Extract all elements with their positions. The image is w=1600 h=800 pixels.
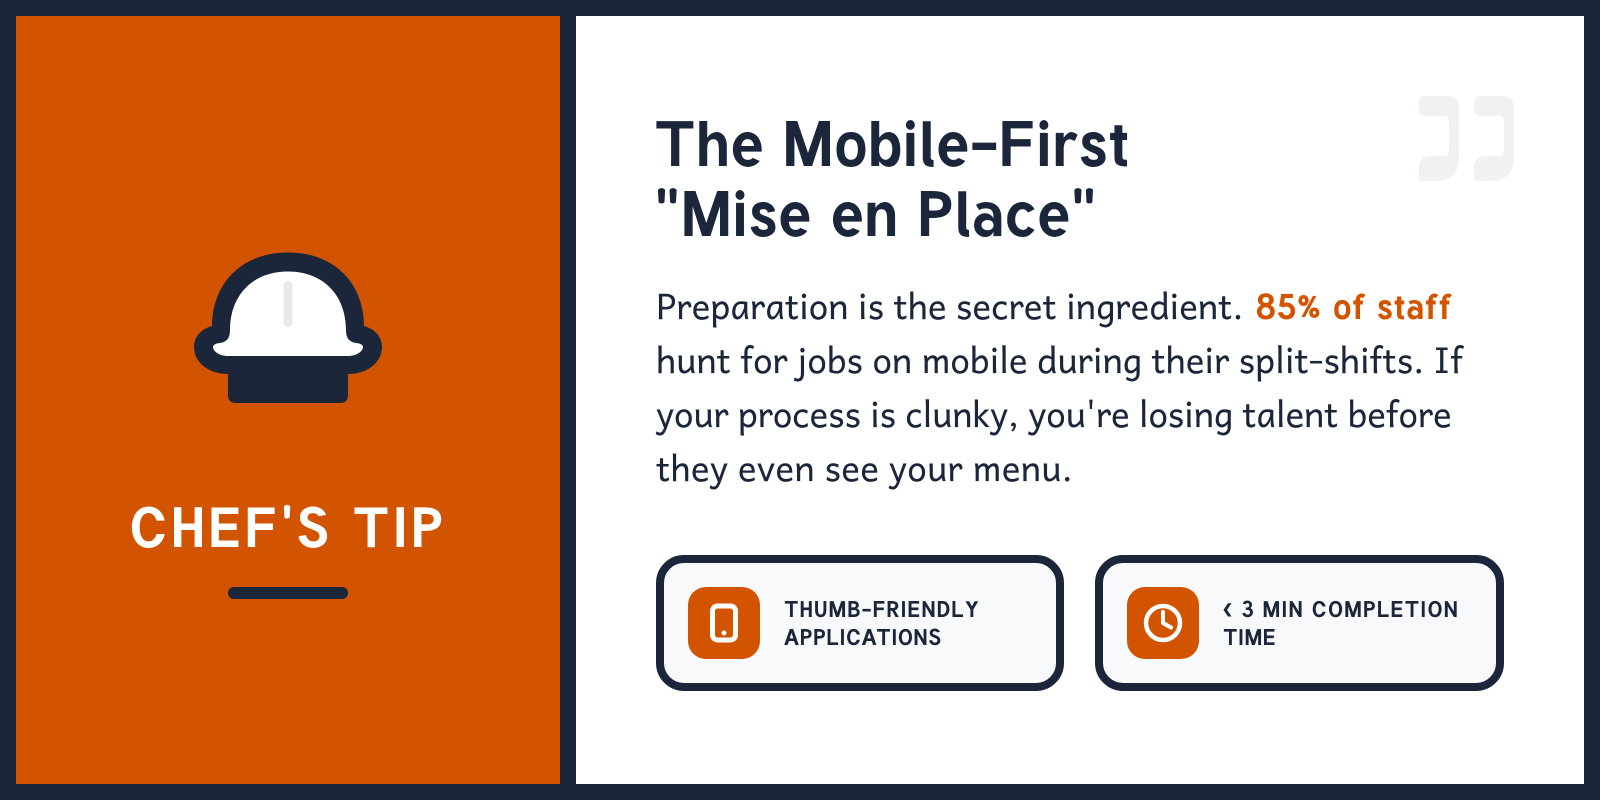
body text: hunt for jobs on mobile during their split-shifts. If (656, 330, 1463, 387)
heading: the mobile-first mise en place (654, 95, 1130, 258)
icon: phone (688, 587, 760, 659)
body text: Preparation is the secret ingredient. 85% of staff (656, 276, 1452, 333)
label: thumb-friendly applications: THUMB-FRIENDLY (784, 593, 980, 625)
label: under 3 min completion time: < 3 MIN COMPLETION (1223, 593, 1459, 625)
label: under 3 min completion time (1223, 593, 1459, 652)
body text (656, 276, 1464, 495)
underline bar (228, 587, 348, 599)
icon: clock (1127, 587, 1199, 659)
card: thumb-friendly applications (656, 555, 1064, 691)
panel: chef's tip (16, 16, 560, 784)
label: under 3 min completion time: TIME (1223, 620, 1276, 652)
icon: decorative quote marks (1419, 96, 1514, 181)
card: under 3 minute completion time (1095, 555, 1504, 691)
body text: your process is clunky, you're losing talent before (656, 384, 1452, 441)
label: thumb-friendly applications: APPLICATIONS (784, 620, 942, 652)
heading: the mobile-first mise en place: "Mise en Place" (654, 165, 1097, 258)
heading: chef's tip: CHEF'S TIP (129, 484, 447, 567)
body text: they even see your menu. (656, 438, 1073, 495)
label: thumb-friendly applications (784, 593, 980, 652)
panel: mobile-first tip (576, 16, 1584, 784)
heading: the mobile-first mise en place: The Mobile-First (654, 95, 1130, 188)
icon: chef hat (194, 252, 382, 403)
